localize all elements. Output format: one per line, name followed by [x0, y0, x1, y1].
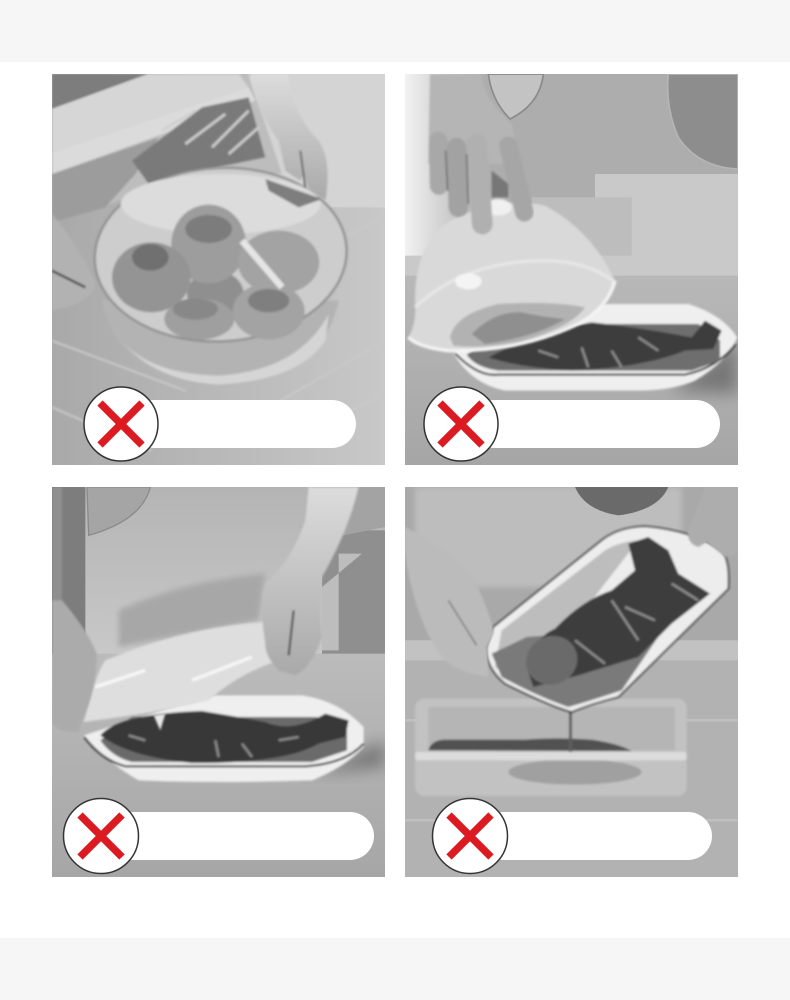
tilted fish dish [487, 526, 729, 712]
panel: dome lid over a fish dish [405, 74, 738, 465]
badge: panel 1 cross [84, 387, 356, 461]
panel: stretch lid over a fish dish [52, 487, 385, 877]
arms and hands [52, 487, 359, 732]
container [415, 699, 687, 796]
badge: panel 3 cross [64, 798, 374, 874]
hand lifting lid [428, 74, 524, 224]
panel: plastic wrap over a bowl of persimmons [52, 74, 385, 465]
dome lid [408, 203, 615, 351]
plastic wrap roll [52, 74, 282, 222]
hands [52, 74, 328, 310]
fish dish [84, 695, 364, 782]
glass bowl with persimmons [90, 162, 351, 386]
arms and hands [405, 528, 728, 675]
stretch lid [84, 622, 279, 730]
panel: pouring fish sauce into a container [405, 487, 738, 877]
badge: panel 2 cross [424, 387, 720, 461]
fish dish [453, 304, 737, 391]
badge: panel 4 cross [432, 798, 712, 874]
